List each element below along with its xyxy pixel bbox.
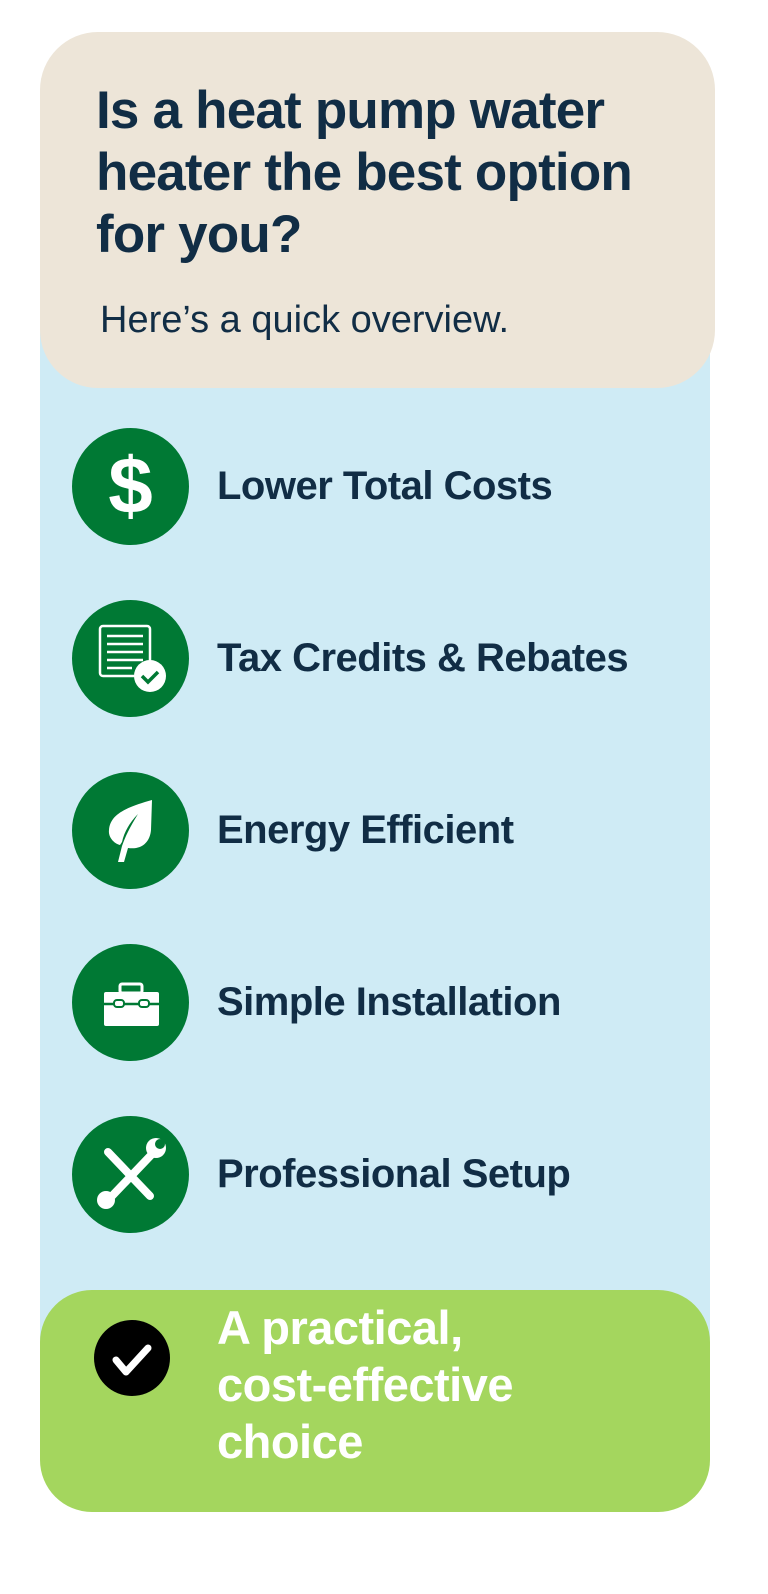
icon: toolbox [72, 944, 189, 1061]
title: Is a heat pump water [96, 81, 604, 140]
item: professional setup: Professional Setup [217, 1152, 570, 1196]
conclusion text: A practical, [217, 1301, 463, 1354]
item: simple installation [72, 944, 561, 1061]
item: lower total costs: Lower Total Costs [217, 464, 552, 508]
conclusion text [217, 1301, 513, 1468]
item: simple installation: Simple Installation [217, 980, 561, 1024]
item: tax credits: Tax Credits & Rebates [217, 636, 628, 680]
icon: check [94, 1320, 170, 1396]
panel: header card [40, 32, 715, 388]
title: for you? [96, 205, 302, 264]
title [96, 81, 632, 264]
icon: document check [72, 600, 189, 717]
panel: blue background [40, 200, 710, 1400]
conclusion text: choice [217, 1415, 363, 1468]
panel: conclusion [40, 1290, 710, 1512]
item: professional setup [72, 1116, 570, 1233]
icon: dollar: $ [108, 441, 153, 530]
title: heater the best option [96, 143, 632, 202]
item: lower total costs [72, 428, 552, 545]
icon: leaf [72, 772, 189, 889]
item: energy efficient: Energy Efficient [217, 808, 514, 852]
item: energy efficient [72, 772, 514, 889]
icon: tools [72, 1116, 189, 1233]
subtitle: Here’s a quick overview. [100, 299, 509, 341]
item: tax credits [72, 600, 628, 717]
conclusion text: cost-effective [217, 1358, 513, 1411]
icon: dollar [72, 428, 189, 545]
